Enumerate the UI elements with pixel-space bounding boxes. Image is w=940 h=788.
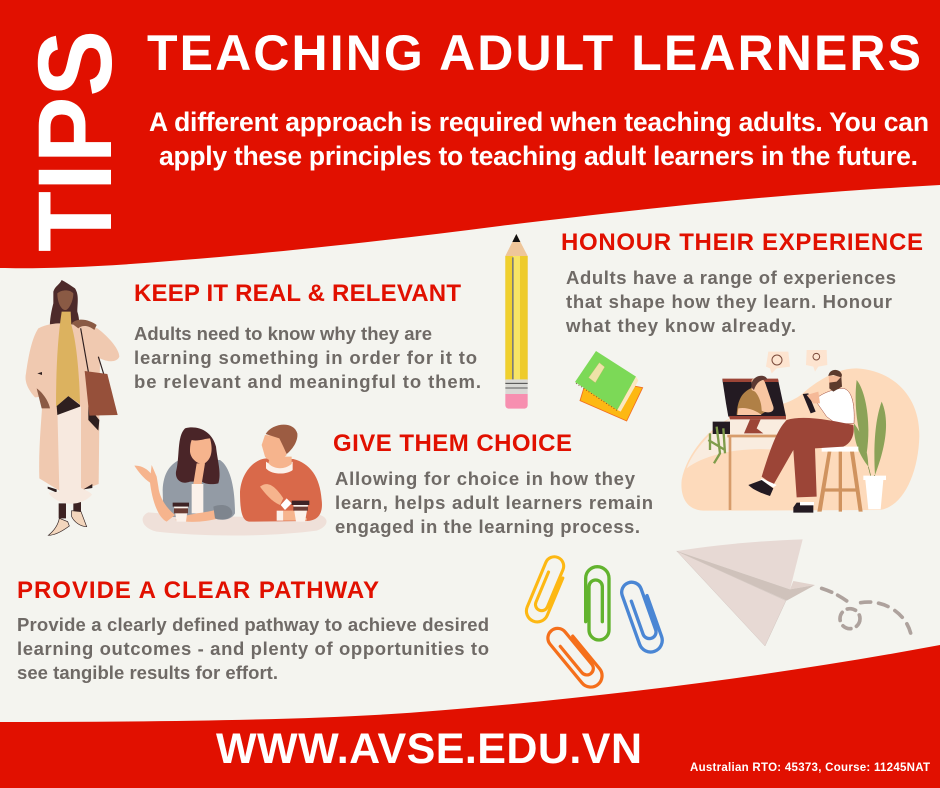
dashed flight path xyxy=(822,588,912,639)
RTO note: Australian RTO: 45373, Course: 11245NAT xyxy=(690,762,930,774)
illustration: pencil xyxy=(505,234,528,409)
heading: honour their experience: HONOUR THEIR EXPERIENCE xyxy=(561,229,923,256)
subtitle xyxy=(149,107,929,171)
top red banner xyxy=(0,0,940,268)
bottom red banner xyxy=(0,645,940,788)
text: give them choice: engaged in the learning process. xyxy=(335,516,640,537)
subtitle: apply these principles to teaching adult learners in the future. xyxy=(159,141,918,171)
text: keep it real: learning something in order for it to xyxy=(134,347,477,368)
heading: keep it real: KEEP IT REAL & RELEVANT xyxy=(134,280,461,307)
heading: provide a clear pathway: PROVIDE A CLEAR PATHWAY xyxy=(17,577,379,604)
text: give them choice: Allowing for choice in how they xyxy=(335,468,636,489)
text: give them choice xyxy=(335,468,653,537)
text: honour their experience xyxy=(565,267,896,336)
vertical label: TIPS: TIPS xyxy=(17,30,134,252)
illustration: notebooks xyxy=(575,351,643,421)
text: keep it real: Adults need to know why they are xyxy=(134,323,432,344)
text: honour their experience: that shape how they learn. Honour xyxy=(566,291,892,312)
title: TEACHING ADULT LEARNERS xyxy=(147,25,921,81)
text: provide a clear pathway: Provide a clearly defined pathway to achieve desired xyxy=(17,614,489,635)
illustration: man at desk with video call xyxy=(681,350,919,513)
text: give them choice: learn, helps adult learners remain xyxy=(335,492,653,513)
text: provide a clear pathway: learning outcomes - and plenty of opportunities to xyxy=(17,638,489,659)
text: honour their experience: what they know already. xyxy=(565,315,796,336)
heading: give them choice: GIVE THEM CHOICE xyxy=(333,430,572,457)
illustration: two people talking xyxy=(134,425,327,536)
illustration: standing woman xyxy=(26,280,119,535)
illustration: paper clips xyxy=(523,554,665,692)
text: provide a clear pathway: see tangible results for effort. xyxy=(17,662,278,683)
text: provide a clear pathway xyxy=(17,614,489,683)
thought bubbles xyxy=(766,350,827,373)
illustration: paper plane xyxy=(677,539,815,646)
website url: WWW.AVSE.EDU.VN xyxy=(216,725,642,773)
text: keep it real xyxy=(134,323,481,392)
text: keep it real: be relevant and meaningful to them. xyxy=(134,371,481,392)
subtitle: A different approach is required when teaching adults. You can xyxy=(149,107,929,137)
text: honour their experience: Adults have a range of experiences xyxy=(566,267,896,288)
